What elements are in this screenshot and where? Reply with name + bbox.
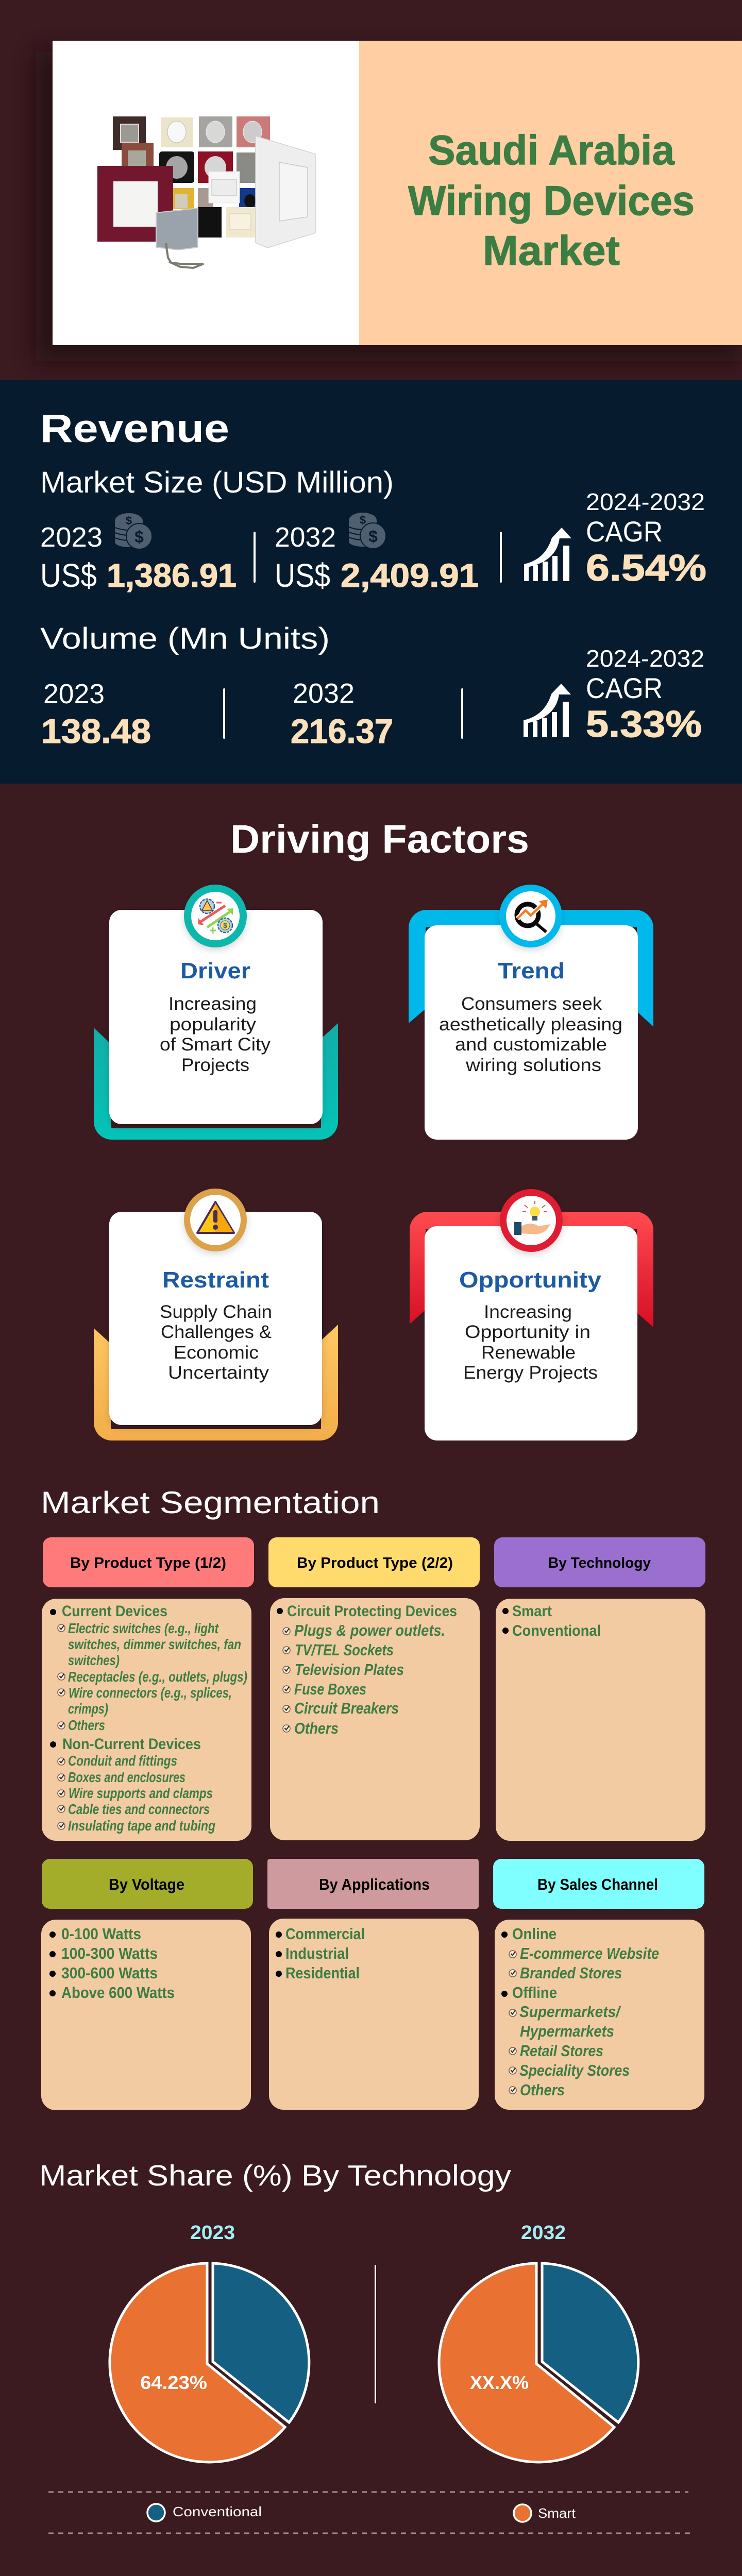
header title panel: Wiring Devices bbox=[408, 178, 695, 224]
product type 2 list: Fuse Boxes bbox=[294, 1680, 366, 1698]
icon: restraint bbox=[184, 1189, 247, 1251]
driver text: Projects bbox=[181, 1055, 249, 1075]
opportunity text: Increasing bbox=[484, 1302, 572, 1322]
trend text: Consumers seek bbox=[461, 994, 602, 1014]
applications list bbox=[276, 1925, 365, 1982]
panel: by sales channel: By Sales Channel bbox=[537, 1875, 658, 1893]
legend: technology: Conventional bbox=[173, 2504, 262, 2519]
sales channel list: Offline bbox=[512, 1984, 557, 2002]
header image panel bbox=[53, 41, 359, 345]
revenue CAGR bbox=[586, 488, 706, 589]
product type 1 list: Receptacles (e.g., outlets, plugs) bbox=[68, 1669, 247, 1685]
volume heading: Volume (Mn Units) bbox=[40, 622, 330, 655]
chart: technology 2023 bbox=[110, 2222, 309, 2462]
sales channel list: Retail Stores bbox=[520, 2042, 603, 2060]
product type 1 list: Current Devices bbox=[62, 1603, 167, 1620]
panel: by product type 1 bbox=[42, 1537, 254, 1841]
revenue CAGR: CAGR bbox=[586, 515, 663, 548]
sales channel list bbox=[501, 1925, 659, 2099]
market size 2032: 2032 bbox=[275, 522, 336, 553]
product type 2 list: Circuit Protecting Devices bbox=[287, 1603, 457, 1620]
product type 1 list: Cable ties and connectors bbox=[68, 1801, 210, 1817]
volume CAGR: 2024-2032 bbox=[586, 645, 704, 672]
driving factors heading: Driving Factors bbox=[230, 817, 529, 861]
product type 2 list: TV/TEL Sockets bbox=[295, 1641, 394, 1659]
icon: growth arrow bbox=[524, 528, 571, 581]
technology list: Conventional bbox=[512, 1622, 601, 1639]
product type 1 list bbox=[50, 1603, 247, 1834]
sales channel list: Speciality Stores bbox=[519, 2061, 630, 2079]
volume 2023: 2023 bbox=[43, 679, 105, 709]
opportunity text bbox=[463, 1302, 598, 1383]
volume CAGR: CAGR bbox=[586, 672, 663, 704]
icon: driver: $ bbox=[223, 921, 227, 929]
volume 2023: 138.48 bbox=[41, 712, 151, 750]
sales channel list: Online bbox=[512, 1925, 556, 1943]
header title panel: Market bbox=[483, 228, 620, 274]
restraint text: Economic bbox=[174, 1343, 259, 1363]
panel: by applications bbox=[267, 1859, 479, 2110]
sales channel list: Hypermarkets bbox=[520, 2022, 614, 2040]
legend: technology bbox=[147, 2504, 576, 2522]
panel: by applications: By Applications bbox=[319, 1875, 430, 1893]
sales channel list: Branded Stores bbox=[520, 1964, 622, 1982]
icon: opportunity bbox=[500, 1189, 563, 1252]
opportunity text: Opportunity in bbox=[465, 1322, 591, 1342]
chart: technology 2023: 2023 bbox=[190, 2222, 235, 2244]
product type 2 list: Others bbox=[294, 1719, 339, 1737]
applications list: Commercial bbox=[285, 1925, 365, 1943]
voltage list bbox=[49, 1925, 175, 2002]
panel: by technology bbox=[494, 1537, 705, 1841]
icon: trend bbox=[499, 885, 562, 947]
product type 1 list: Wire connectors (e.g., splices, bbox=[69, 1685, 232, 1701]
market size heading: Market Size (USD Million) bbox=[40, 466, 394, 499]
product type 1 list: Wire supports and clamps bbox=[69, 1785, 213, 1801]
market size 2023: 2023 bbox=[40, 522, 103, 553]
opportunity title: Opportunity bbox=[459, 1267, 602, 1293]
voltage list: 100-300 Watts bbox=[61, 1944, 158, 1962]
restraint text: Challenges & bbox=[161, 1322, 272, 1342]
volume 2032: 2032 bbox=[293, 678, 355, 709]
trend text bbox=[439, 994, 622, 1075]
revenue heading: Revenue bbox=[40, 406, 229, 451]
trend title: Trend bbox=[498, 958, 565, 984]
technology list: Smart bbox=[512, 1603, 552, 1620]
opportunity text: Energy Projects bbox=[463, 1363, 598, 1383]
panel: driver bbox=[94, 885, 338, 1140]
product type 1 list: Non-Current Devices bbox=[62, 1736, 201, 1753]
driver title: Driver bbox=[180, 958, 250, 984]
panel: revenue bbox=[0, 380, 742, 784]
restraint text bbox=[160, 1302, 272, 1383]
panel: opportunity bbox=[410, 1189, 653, 1440]
trend text: wiring solutions bbox=[465, 1055, 601, 1075]
sales channel list: E-commerce Website bbox=[520, 1944, 659, 1962]
applications list: Residential bbox=[285, 1964, 360, 1982]
header banner bbox=[36, 41, 742, 361]
driver text: Increasing bbox=[168, 994, 257, 1014]
product type 1 list: Boxes and enclosures bbox=[68, 1769, 185, 1785]
chart: technology 2032: 2032 bbox=[521, 2222, 566, 2244]
market size 2032: US$ bbox=[275, 557, 330, 594]
opportunity text: Renewable bbox=[481, 1343, 576, 1363]
market size 2023: US$ bbox=[40, 557, 97, 594]
panel: by technology: By Technology bbox=[548, 1555, 651, 1571]
panel: by product type 2: By Product Type (2/2) bbox=[297, 1555, 453, 1571]
icon: driver bbox=[184, 885, 247, 947]
product type 1 list: Others bbox=[68, 1717, 105, 1733]
product type 1 list: Insulating tape and tubing bbox=[68, 1818, 215, 1834]
voltage list: 0-100 Watts bbox=[61, 1925, 141, 1943]
market segmentation heading: Market Segmentation bbox=[41, 1485, 380, 1520]
restraint text: Supply Chain bbox=[160, 1302, 272, 1322]
chart: technology 2032: XX.X% bbox=[470, 2372, 529, 2393]
voltage list: 300-600 Watts bbox=[61, 1964, 158, 1982]
revenue CAGR: 6.54% bbox=[586, 548, 706, 589]
voltage list: Above 600 Watts bbox=[61, 1984, 175, 2002]
product type 1 list: Electric switches (e.g., light bbox=[68, 1620, 219, 1636]
volume 2023 bbox=[41, 679, 151, 750]
icon: growth arrow volume bbox=[524, 684, 571, 737]
market size 2032 bbox=[275, 522, 479, 594]
restraint text: Uncertainty bbox=[168, 1363, 269, 1383]
product type 1 list: switches) bbox=[68, 1652, 120, 1668]
driver text: popularity bbox=[170, 1014, 257, 1035]
trend text: aesthetically pleasing bbox=[439, 1014, 622, 1035]
panel: by voltage: By Voltage bbox=[109, 1875, 184, 1893]
panel: by sales channel bbox=[493, 1859, 704, 2110]
revenue CAGR: 2024-2032 bbox=[586, 488, 705, 515]
header title panel bbox=[359, 41, 742, 345]
trend text: and customizable bbox=[455, 1035, 607, 1055]
restraint title: Restraint bbox=[162, 1267, 269, 1293]
market share by technology heading: Market Share (%) By Technology bbox=[39, 2159, 512, 2192]
applications list: Industrial bbox=[285, 1944, 349, 1962]
panel: by voltage bbox=[41, 1859, 253, 2110]
chart: technology 2032 bbox=[439, 2222, 638, 2462]
market size 2023: 1,386.91 bbox=[107, 557, 237, 594]
panel: by product type 2 bbox=[268, 1537, 480, 1840]
market size 2023 bbox=[40, 522, 237, 594]
chart: technology 2023: 64.23% bbox=[140, 2372, 207, 2393]
volume CAGR bbox=[586, 645, 704, 745]
product type 2 list: Plugs & power outlets. bbox=[294, 1621, 445, 1639]
volume 2032: 216.37 bbox=[291, 712, 393, 750]
volume CAGR: 5.33% bbox=[586, 704, 702, 745]
panel: trend bbox=[409, 885, 653, 1140]
sales channel list: Others bbox=[520, 2081, 565, 2099]
driver text: of Smart City bbox=[160, 1035, 271, 1055]
volume 2032 bbox=[291, 678, 393, 750]
header title panel: Saudi Arabia bbox=[428, 127, 675, 174]
product type 2 list: Circuit Breakers bbox=[294, 1699, 399, 1717]
technology list bbox=[502, 1603, 601, 1639]
product type 1 list: crimps) bbox=[68, 1701, 108, 1717]
panel: by product type 1: By Product Type (1/2) bbox=[70, 1555, 226, 1571]
product type 1 list: switches, dimmer switches, fan bbox=[68, 1636, 241, 1652]
driver text bbox=[160, 994, 271, 1075]
panel: restraint bbox=[94, 1189, 338, 1440]
market size 2032: 2,409.91 bbox=[341, 557, 479, 594]
product type 2 list: Television Plates bbox=[295, 1660, 404, 1679]
sales channel list: Supermarkets/ bbox=[519, 2003, 621, 2021]
icon: coins 2032 bbox=[349, 513, 386, 549]
icon: coins 2023 bbox=[115, 513, 152, 549]
product type 2 list bbox=[277, 1603, 457, 1737]
product type 1 list: Conduit and fittings bbox=[68, 1753, 177, 1769]
legend: technology: Smart bbox=[538, 2505, 576, 2521]
